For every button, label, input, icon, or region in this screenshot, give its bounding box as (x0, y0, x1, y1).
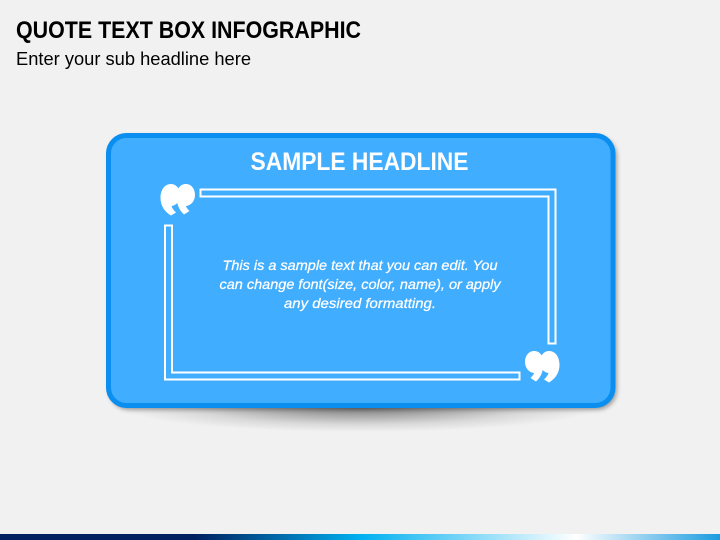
card body (108, 136, 613, 406)
card headline: SAMPLE HEADLINE (250, 148, 468, 176)
ground shadow under card (120, 382, 600, 432)
quote body text: This is a sample text that you can edit. You (222, 257, 498, 273)
quote body text (220, 257, 502, 311)
icon: opening quote mark (160, 184, 195, 216)
icon: closing quote mark (525, 351, 560, 382)
panel: quote card (108, 136, 613, 406)
frame: bottom left bracket (165, 226, 520, 380)
frame: top right bracket (200, 190, 556, 344)
title: QUOTE TEXT BOX INFOGRAPHIC (16, 17, 361, 44)
bottom gradient bar (0, 534, 720, 540)
card drop shadow (109, 136, 617, 410)
quote body text: any desired formatting. (284, 295, 436, 311)
quote body text: can change font(size, color, name), or apply (220, 276, 502, 292)
subtitle: Enter your sub headline here (16, 49, 251, 69)
